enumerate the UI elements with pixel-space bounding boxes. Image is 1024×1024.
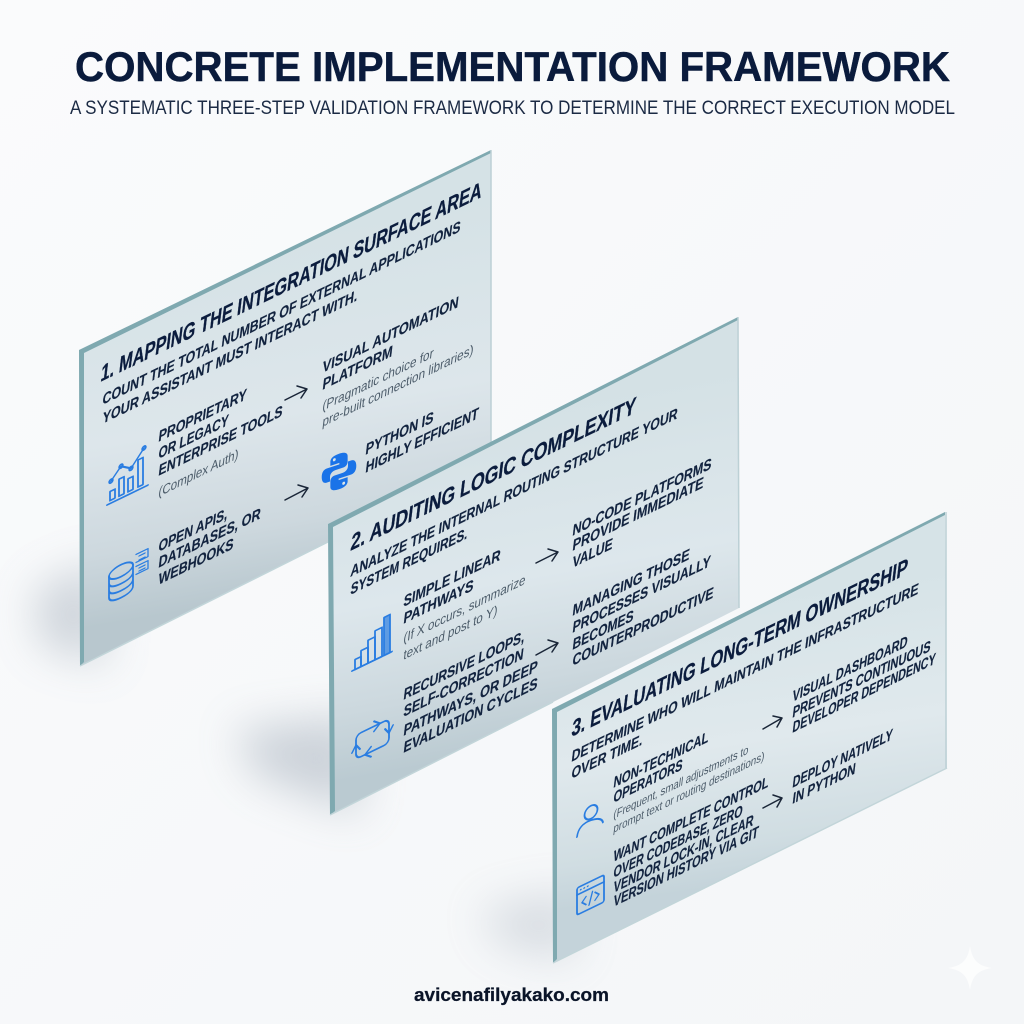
condition: proprietary tools: ENTERPRISE TOOLS [158,402,284,480]
condition: non-technical operators: prompt text or routing destinations) [613,748,765,836]
arrow [763,795,782,808]
icon: person [577,800,603,837]
arrow [536,549,558,563]
title: CONCRETE IMPLEMENTATION FRAMEWORK [75,43,950,90]
condition: non-technical operators: OPERATORS [613,755,684,807]
step 2 heading: 2. AUDITING LOGIC COMPLEXITY [349,392,638,557]
result: python is highly efficient [365,404,480,477]
step 1 heading: 1. MAPPING THE INTEGRATION SURFACE AREA [99,176,483,388]
result: managing visually: BECOMES [572,606,635,654]
step 2 description: ANALYZE THE INTERNAL ROUTING STRUCTURE YOUR [350,404,679,581]
icon: bar chart [352,614,392,671]
condition: complete control: WANT COMPLETE CONTROL [613,773,770,866]
condition: simple linear pathways: SIMPLE LINEAR [403,546,502,611]
condition: proprietary tools: PROPRIETARY [158,385,248,446]
step 2 description: SYSTEM REQUIRES. [350,524,469,599]
condition: proprietary tools: (Complex Auth) [158,447,239,501]
result: no-code platforms: VALUE [572,534,614,572]
condition: open APIs: OPEN APIS, [158,504,229,556]
step 1 description: YOUR ASSISTANT MUST INTERACT WITH. [102,286,359,428]
condition: complete control: VERSION HISTORY VIA GIT [613,822,760,911]
icon: analytics chart [107,444,148,505]
result: deploy natively: DEPLOY NATIVELY [792,725,894,792]
condition: open APIs: WEBHOOKS [158,534,235,589]
condition: proprietary tools: OR LEGACY [158,411,230,463]
icon: database [109,549,148,604]
condition: open APIs: DATABASES, OR [158,504,262,572]
condition: complete control: VENDOR LOCK-IN, CLEAR [613,811,755,897]
condition: non-technical operators: (Frequent, small adjustments to [613,742,749,822]
condition: simple linear pathways: PATHWAYS [403,576,475,628]
arrow [285,386,307,400]
condition: simple linear pathways: text and post to Y) [403,603,498,664]
step 3 description: DETERMINE WHO WILL MAINTAIN THE INFRASTRUCTURE [571,580,920,766]
result: managing visually [572,545,715,670]
result: no-code platforms: NO-CODE PLATFORMS [572,454,713,540]
result: visual dashboard: VISUAL DASHBOARD [792,632,909,706]
icon: loop cycle [352,712,393,766]
icon: code window [577,875,604,915]
step 1 description: COUNT THE TOTAL NUMBER OF EXTERNAL APPLICATIONS [102,217,462,409]
footer url: avicenafilyakako.com [414,985,609,1005]
arrow [285,485,308,500]
panel: step 3 evaluating long-term ownership [480,512,947,963]
condition: recursive loops: PATHWAYS, OR DEEP [403,657,539,740]
condition: complete control: OVER CODEBASE, ZERO [613,801,744,882]
result: managing visually: COUNTERPRODUCTIVE [572,583,715,670]
result: deploy natively [792,725,894,808]
result: visual automation platform [322,293,474,431]
condition: recursive loops: RECURSIVE LOOPS, [403,627,526,704]
result: python is highly efficient: HIGHLY EFFICIENT [365,404,480,477]
arrow [763,716,782,729]
panel: step 1 mapping the integration surface area [35,150,491,666]
result: deploy natively: IN PYTHON [792,759,857,808]
result: managing visually: MANAGING THOSE [572,545,691,620]
result: visual automation platform: (Pragmatic choice for [322,346,434,415]
condition: complete control [613,773,770,911]
result: visual automation platform: pre-built connection libraries) [322,342,474,431]
step 2 description [350,404,679,599]
result: visual automation platform: PLATFORM [322,342,394,394]
condition: non-technical operators: NON-TECHNICAL [613,728,710,792]
condition: simple linear pathways [403,546,526,664]
icon: python logo [322,448,356,495]
arrow [536,640,558,655]
panel: step 2 auditing logic complexity [235,317,739,815]
result: no-code platforms: PROVIDE IMMEDIATE [572,473,705,555]
result: visual dashboard [792,632,937,737]
condition: recursive loops: SELF-CORRECTION [403,645,525,721]
condition: proprietary tools [158,385,284,501]
result: python is highly efficient: PYTHON IS [365,408,435,459]
step 3 description: OVER TIME. [571,730,644,783]
condition: simple linear pathways: (If X occurs, summarize [403,573,526,647]
icon: sparkle watermark [948,946,992,990]
condition: recursive loops [403,627,539,757]
step 3 description [571,580,920,783]
result: managing visually: PROCESSES VISUALLY [572,552,712,637]
result: visual automation platform: VISUAL AUTOMATION [322,293,460,377]
result: visual dashboard: DEVELOPER DEPENDENCY [792,649,937,737]
result: visual dashboard: PREVENTS CONTINUOUS [792,637,932,722]
condition: recursive loops: EVALUATION CYCLES [403,674,539,757]
